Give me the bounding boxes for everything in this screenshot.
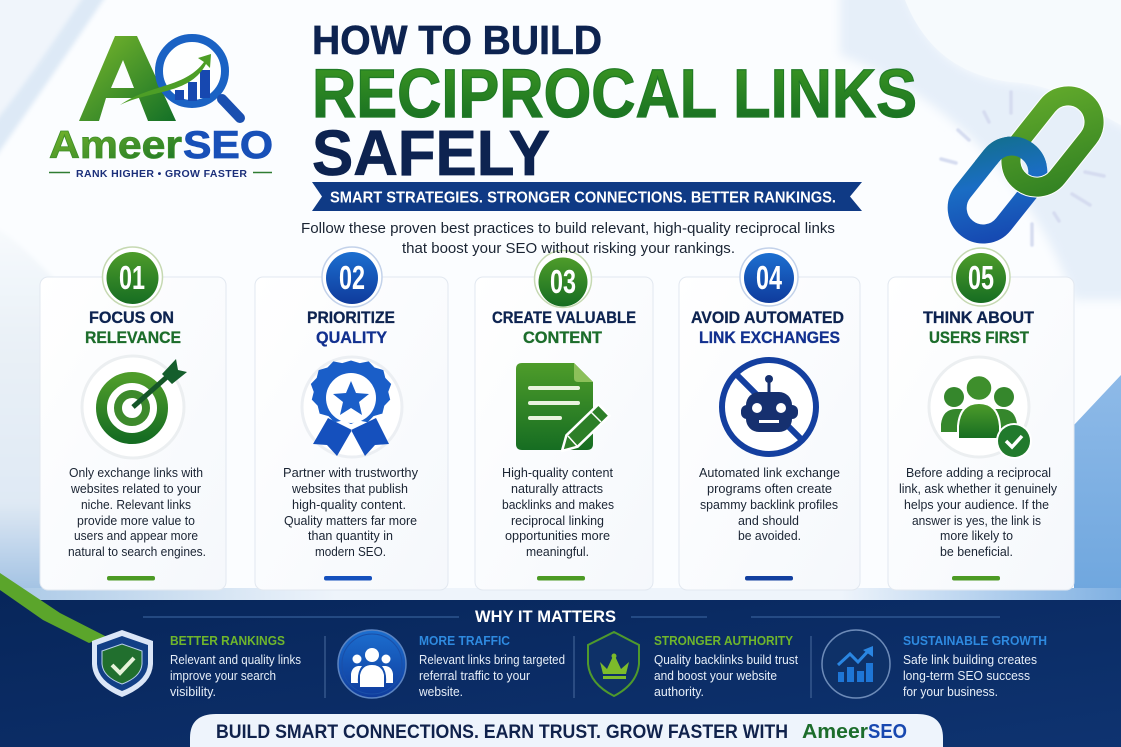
badge: 03: [534, 250, 592, 308]
description: niche. Relevant links: [81, 498, 191, 512]
heading: CONTENT: [523, 328, 603, 347]
description: backlinks and makes: [502, 498, 614, 512]
heading: FOCUS ON: [89, 308, 174, 327]
heading: [691, 308, 844, 347]
benefit: better rankings: BETTER RANKINGS: [170, 634, 285, 648]
description: answer is yes, the link is: [912, 514, 1041, 528]
description: helps your audience. If the: [904, 498, 1049, 512]
panel: 01 focus on relevance: [40, 247, 226, 590]
benefit: sustainable growth: Safe link building creates: [903, 653, 1037, 667]
heading: [307, 308, 395, 347]
heading: [85, 308, 181, 347]
subtitle ribbon: SMART STRATEGIES. STRONGER CONNECTIONS. BETTER RANKINGS.: [330, 190, 836, 206]
icon: crown shield: [588, 632, 639, 696]
badge: 03: 03: [550, 263, 576, 300]
badge: 04: 04: [756, 259, 782, 296]
description: [283, 466, 419, 559]
benefit: more traffic: website.: [418, 685, 463, 699]
heading: QUALITY: [316, 328, 388, 347]
description: websites that publish: [291, 482, 408, 496]
description: and should: [738, 514, 799, 528]
description: Partner with trustworthy: [283, 466, 419, 480]
description: Automated link exchange: [699, 466, 840, 480]
green swoosh: [0, 573, 107, 643]
heading: USERS FIRST: [929, 328, 1030, 347]
logo tagline: RANK HIGHER • GROW FASTER: [76, 168, 247, 180]
description: Only exchange links with: [69, 466, 203, 480]
title: RECIPROCAL LINKS: [312, 55, 917, 132]
accent bar: [952, 576, 1000, 580]
accent bar: [324, 576, 372, 580]
icon: document with pencil: [516, 363, 610, 451]
description: High-quality content: [502, 466, 614, 480]
badge: 05: [952, 248, 1010, 306]
logo: AmeerSEO: [49, 36, 273, 180]
call to action pill: SEO: [868, 721, 907, 743]
icon: growth chart circle: [822, 630, 890, 698]
benefit: sustainable growth: long-term SEO success: [903, 669, 1030, 683]
heading: why it matters: WHY IT MATTERS: [475, 608, 616, 626]
title: [312, 17, 917, 189]
badge: 05: 05: [968, 259, 994, 296]
benefit: stronger authority: authority.: [654, 685, 704, 699]
description: websites related to your: [70, 482, 201, 496]
badge: 04: [740, 248, 798, 306]
badge: 01: [102, 247, 162, 307]
title: HOW TO BUILD: [312, 17, 602, 63]
benefit: more traffic: referral traffic to your: [419, 669, 530, 683]
intro text: that boost your SEO without risking your rankings.: [402, 240, 735, 257]
title: SAFELY: [312, 117, 550, 189]
call to action pill: [190, 714, 943, 747]
description: [899, 466, 1058, 559]
call to action pill: Ameer: [802, 721, 868, 743]
heading: PRIORITIZE: [307, 308, 395, 327]
heading: AVOID AUTOMATED: [691, 308, 844, 327]
accent bar: [745, 576, 793, 580]
benefit: sustainable growth: SUSTAINABLE GROWTH: [903, 634, 1047, 648]
description: [699, 466, 840, 543]
call to action pill: BUILD SMART CONNECTIONS. EARN TRUST. GROW FASTER WITH: [216, 721, 788, 743]
subtitle ribbon: [312, 182, 862, 211]
panel: 05 think about users first: [888, 248, 1074, 590]
description: link, ask whether it genuinely: [899, 482, 1058, 496]
description: Before adding a reciprocal: [906, 466, 1051, 480]
logo mark: letter A: [79, 36, 176, 121]
description: [68, 466, 206, 559]
benefit: stronger authority: [588, 632, 799, 699]
icon: users with check: [929, 357, 1032, 459]
logo mark: growth arrow: [120, 54, 211, 105]
description: programs often create: [707, 482, 832, 496]
description: meaningful.: [526, 545, 589, 559]
description: users and appear more: [74, 529, 198, 543]
panel: 02 prioritize quality: [255, 247, 448, 590]
badge: 02: [322, 247, 382, 307]
heading: [923, 308, 1035, 347]
heading: RELEVANCE: [85, 328, 181, 347]
description: be avoided.: [738, 529, 801, 543]
description: reciprocal linking: [511, 514, 604, 528]
description: natural to search engines.: [68, 545, 206, 559]
badge: 01: 01: [119, 259, 145, 296]
benefit: more traffic: Relevant links bring targeted: [419, 653, 565, 667]
icon: no robots: [722, 360, 816, 454]
icon: audience circle: [338, 630, 406, 698]
intro text: [301, 220, 835, 257]
benefit: better rankings: visibility.: [170, 685, 216, 699]
intro text: Follow these proven best practices to build relevant, high-quality reciprocal links: [301, 220, 835, 237]
description: than quantity in: [308, 529, 393, 543]
description: high-quality content.: [292, 498, 406, 512]
logo mark: magnifying glass: [159, 38, 240, 118]
description: Quality matters far more: [284, 514, 417, 528]
benefit: stronger authority: STRONGER AUTHORITY: [654, 634, 794, 648]
benefit: sustainable growth: [822, 630, 1047, 699]
heading: THINK ABOUT: [923, 308, 1035, 327]
benefit: better rankings: [92, 630, 301, 699]
heading: CREATE VALUABLE: [492, 308, 636, 327]
description: [502, 466, 614, 559]
benefit: sustainable growth: for your business.: [903, 685, 998, 699]
description: more likely to: [940, 529, 1013, 543]
description: be beneficial.: [940, 545, 1013, 559]
logo: AmeerSEO: SEO: [183, 124, 273, 167]
logo wordmark: Ameer: [49, 124, 182, 167]
accent bar: [107, 576, 155, 580]
icon: chain link: [941, 85, 1105, 245]
accent bar: [537, 576, 585, 580]
description: naturally attracts: [511, 482, 603, 496]
benefit: better rankings: Relevant and quality links: [170, 653, 301, 667]
icon: shield check: [92, 630, 153, 697]
heading: LINK EXCHANGES: [699, 328, 840, 347]
panel: 03 create valuable content: [475, 250, 653, 590]
benefit: stronger authority: and boost your website: [654, 669, 777, 683]
description: provide more value to: [77, 514, 195, 528]
benefit: stronger authority: Quality backlinks build trust: [654, 653, 799, 667]
benefit: more traffic: [338, 630, 565, 699]
description: spammy backlink profiles: [700, 498, 838, 512]
benefit: more traffic: MORE TRAFFIC: [419, 634, 510, 648]
panel: why it matters band: [0, 573, 1121, 747]
icon: award ribbon: [302, 357, 402, 457]
heading: [492, 308, 636, 347]
panel: 04 avoid automated link exchanges: [679, 248, 860, 590]
description: modern SEO.: [315, 545, 386, 559]
badge: 02: 02: [339, 259, 365, 296]
description: opportunities more: [505, 529, 610, 543]
icon: target with arrow: [82, 356, 187, 458]
benefit: better rankings: improve your search: [170, 669, 276, 683]
